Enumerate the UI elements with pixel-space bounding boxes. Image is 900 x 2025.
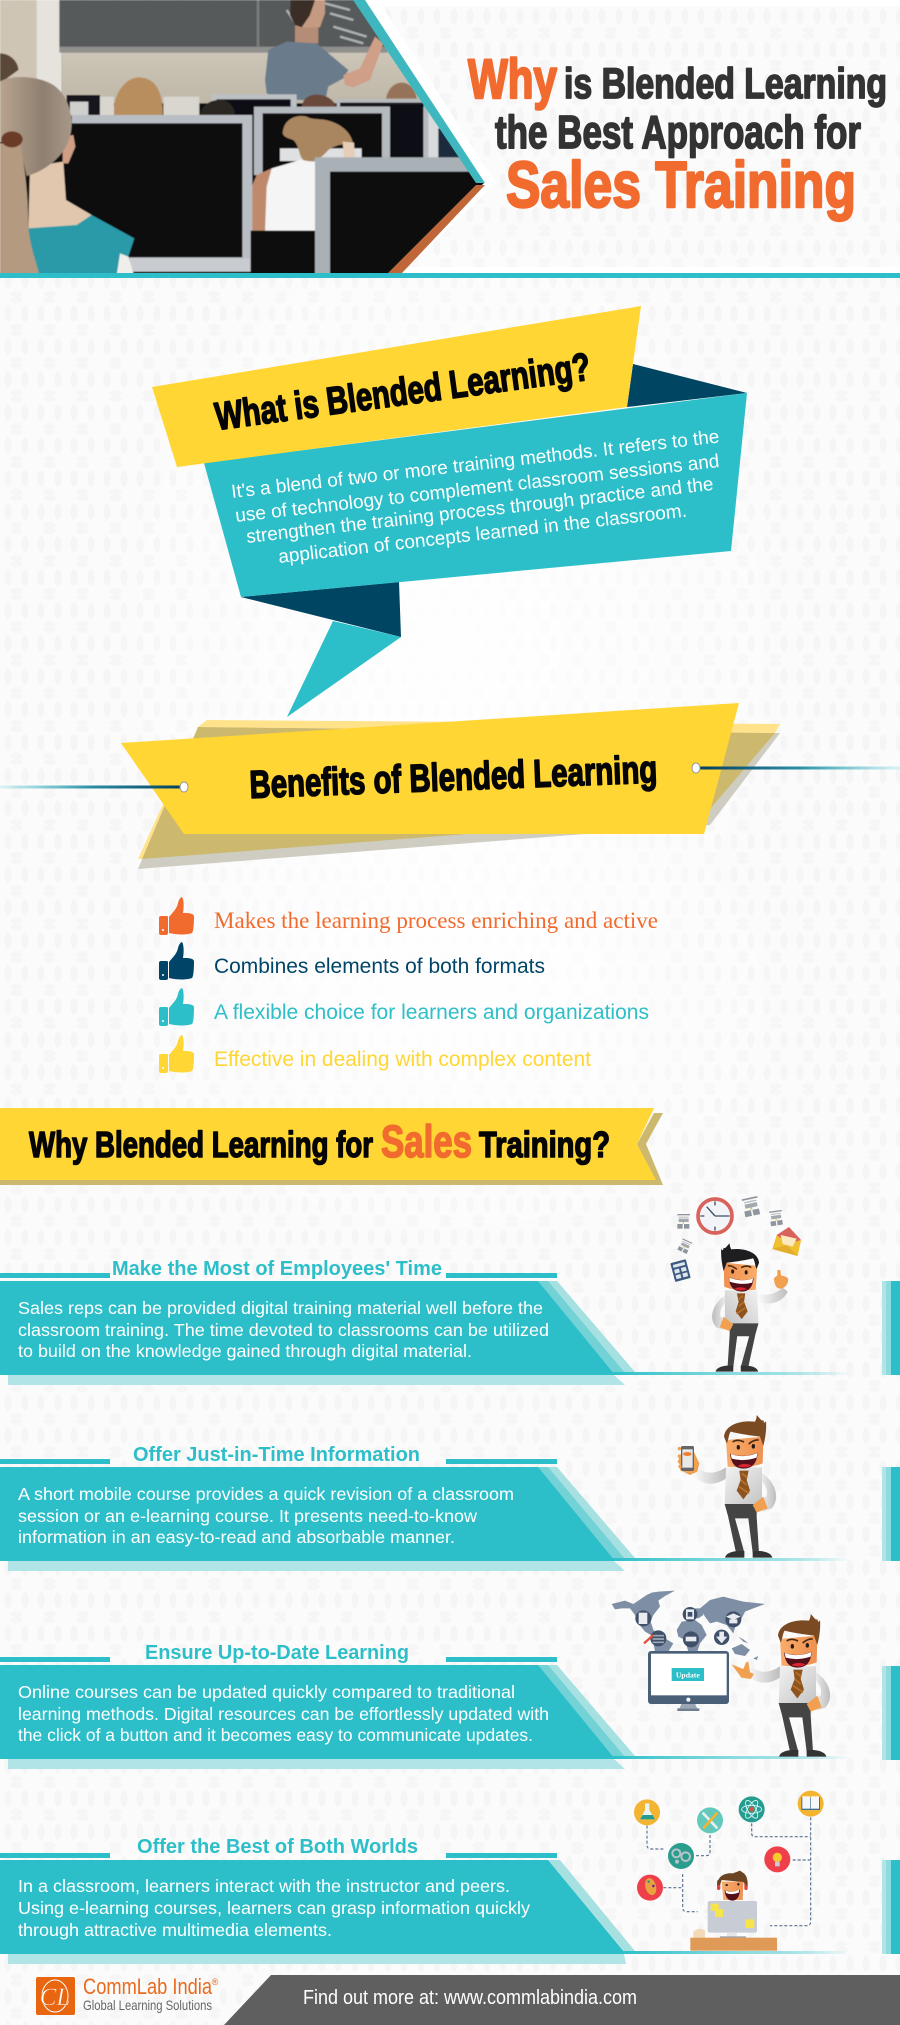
heading: benefits of blended learning: Benefits of Blended Learning xyxy=(249,748,658,807)
icon: book xyxy=(798,1791,824,1817)
man figure xyxy=(732,1614,830,1757)
icon: flask xyxy=(634,1799,660,1825)
panel: card 4 both worlds xyxy=(0,1836,850,1964)
icon: phone in hand xyxy=(678,1446,699,1475)
logo: commlab india: CL xyxy=(40,1984,70,2011)
logo: commlab india: CommLab India xyxy=(83,1974,213,1999)
icon: atom xyxy=(739,1796,765,1822)
dashed connectors xyxy=(647,1817,811,1926)
logo: commlab india xyxy=(36,1974,219,2015)
header panel xyxy=(0,0,900,276)
icons: documents xyxy=(677,1196,784,1254)
text: A short mobile course provides a quick revision of a classroom xyxy=(18,1484,514,1504)
monitor xyxy=(648,1651,729,1711)
update label: Update xyxy=(676,1670,700,1679)
icon: thumb navy xyxy=(159,942,194,980)
icon: thumb yellow xyxy=(159,1035,194,1073)
heading: why blended learning for sales training: Training? xyxy=(479,1124,610,1165)
illustration: man with phone xyxy=(678,1415,776,1558)
panel: why blended learning banner xyxy=(0,1108,663,1185)
learner at laptop xyxy=(690,1871,777,1951)
illustration: world map and update monitor xyxy=(612,1591,830,1757)
heading: why blended learning for sales training xyxy=(29,1116,610,1167)
text: session or an e-learning course. It presents need-to-know xyxy=(18,1506,477,1526)
heading: Ensure Up-to-Date Learning xyxy=(145,1642,409,1664)
front right monitor xyxy=(315,157,482,275)
text: Online courses can be updated quickly compared to traditional xyxy=(18,1682,515,1702)
map icons xyxy=(635,1607,741,1647)
right edge tabs xyxy=(882,1281,900,1954)
panel: benefits list xyxy=(159,897,658,1073)
text: to build on the knowledge gained through digital material. xyxy=(18,1341,472,1361)
panel: card 2 just-in-time xyxy=(0,1444,850,1571)
text: learning methods. Digital resources can be effortlessly updated with xyxy=(18,1704,549,1724)
title xyxy=(468,47,887,221)
icon: light bulb xyxy=(764,1846,790,1872)
text: the click of a button and it becomes easy to communicate updates. xyxy=(18,1725,533,1745)
icon: envelope xyxy=(772,1227,801,1256)
back row xyxy=(67,95,100,117)
logo: commlab india: Global Learning Solutions xyxy=(83,1997,212,2013)
text block: definition: use of technology to complement classroom sessions and xyxy=(234,451,720,527)
string right xyxy=(699,766,900,770)
heading: Offer Just-in-Time Information xyxy=(133,1444,420,1466)
text: Using e-learning courses, learners can grasp information quickly xyxy=(18,1898,530,1918)
panel: card 3 up-to-date xyxy=(0,1642,850,1769)
header photo: classroom xyxy=(0,0,500,276)
string left xyxy=(0,786,182,788)
benefit 1: Makes the learning process enriching and active xyxy=(214,908,658,933)
text block: definition: application of concepts learned in the classroom. xyxy=(277,501,688,568)
middle monitor and woman xyxy=(254,107,389,175)
text: In a classroom, learners interact with the instructor and peers. xyxy=(18,1876,510,1896)
icon: calculator xyxy=(670,1259,691,1282)
text xyxy=(18,1484,514,1547)
heading: Make the Most of Employees' Time xyxy=(112,1258,442,1280)
text block: definition: strengthen the training process through practice and the xyxy=(245,474,715,548)
heading: why blended learning for sales training: Why Blended Learning for xyxy=(29,1124,373,1165)
text block: definition: It's a blend of two or more training methods. It refers to the xyxy=(230,427,720,503)
arm raised xyxy=(758,1287,788,1304)
benefit 4: Effective in dealing with complex content xyxy=(214,1047,591,1071)
icon: palette xyxy=(637,1875,663,1901)
panel: card 1 employees' time xyxy=(0,1258,850,1385)
text: classroom training. The time devoted to classrooms can be utilized xyxy=(18,1320,549,1340)
text xyxy=(18,1298,549,1361)
icon: thumb teal xyxy=(159,988,194,1026)
hand pointing up xyxy=(774,1270,788,1289)
illustration: learner at laptop with subject icons xyxy=(634,1791,824,1951)
text xyxy=(18,1876,530,1940)
text block: definition xyxy=(230,427,720,568)
illustration: man juggling time tasks xyxy=(670,1196,801,1372)
heading: why blended learning for sales training: Sales xyxy=(381,1116,472,1167)
teacher xyxy=(295,23,318,43)
man figure xyxy=(712,1243,759,1372)
text xyxy=(18,1682,549,1745)
left woman xyxy=(0,53,18,83)
world map xyxy=(612,1591,765,1660)
icon: tools xyxy=(697,1807,723,1833)
text: information in an easy-to-read and absorbable manner. xyxy=(18,1527,455,1547)
text: Sales reps can be provided digital training material well before the xyxy=(18,1298,543,1318)
benefit 3: A flexible choice for learners and organizations xyxy=(214,1000,649,1024)
header accent bar xyxy=(0,273,900,278)
man figure xyxy=(724,1415,776,1558)
text: through attractive multimedia elements. xyxy=(18,1920,332,1940)
title: Why xyxy=(468,47,557,110)
benefit 2: Combines elements of both formats xyxy=(214,954,545,978)
heading: what is blended learning: What is Blended Learning? xyxy=(212,346,593,439)
icon: thumb orange xyxy=(159,897,194,935)
panel: benefits banner xyxy=(0,703,900,869)
icon: gears xyxy=(668,1843,694,1869)
heading: Offer the Best of Both Worlds xyxy=(137,1836,418,1858)
logo: commlab india: ® xyxy=(212,1977,219,1987)
footer call to action: Find out more at: www.commlabindia.com xyxy=(303,1987,637,2009)
big monitor xyxy=(72,115,252,272)
panel: what is blended learning ribbon xyxy=(152,306,747,717)
footer bar xyxy=(224,1975,900,2025)
icon: clock xyxy=(698,1199,732,1233)
